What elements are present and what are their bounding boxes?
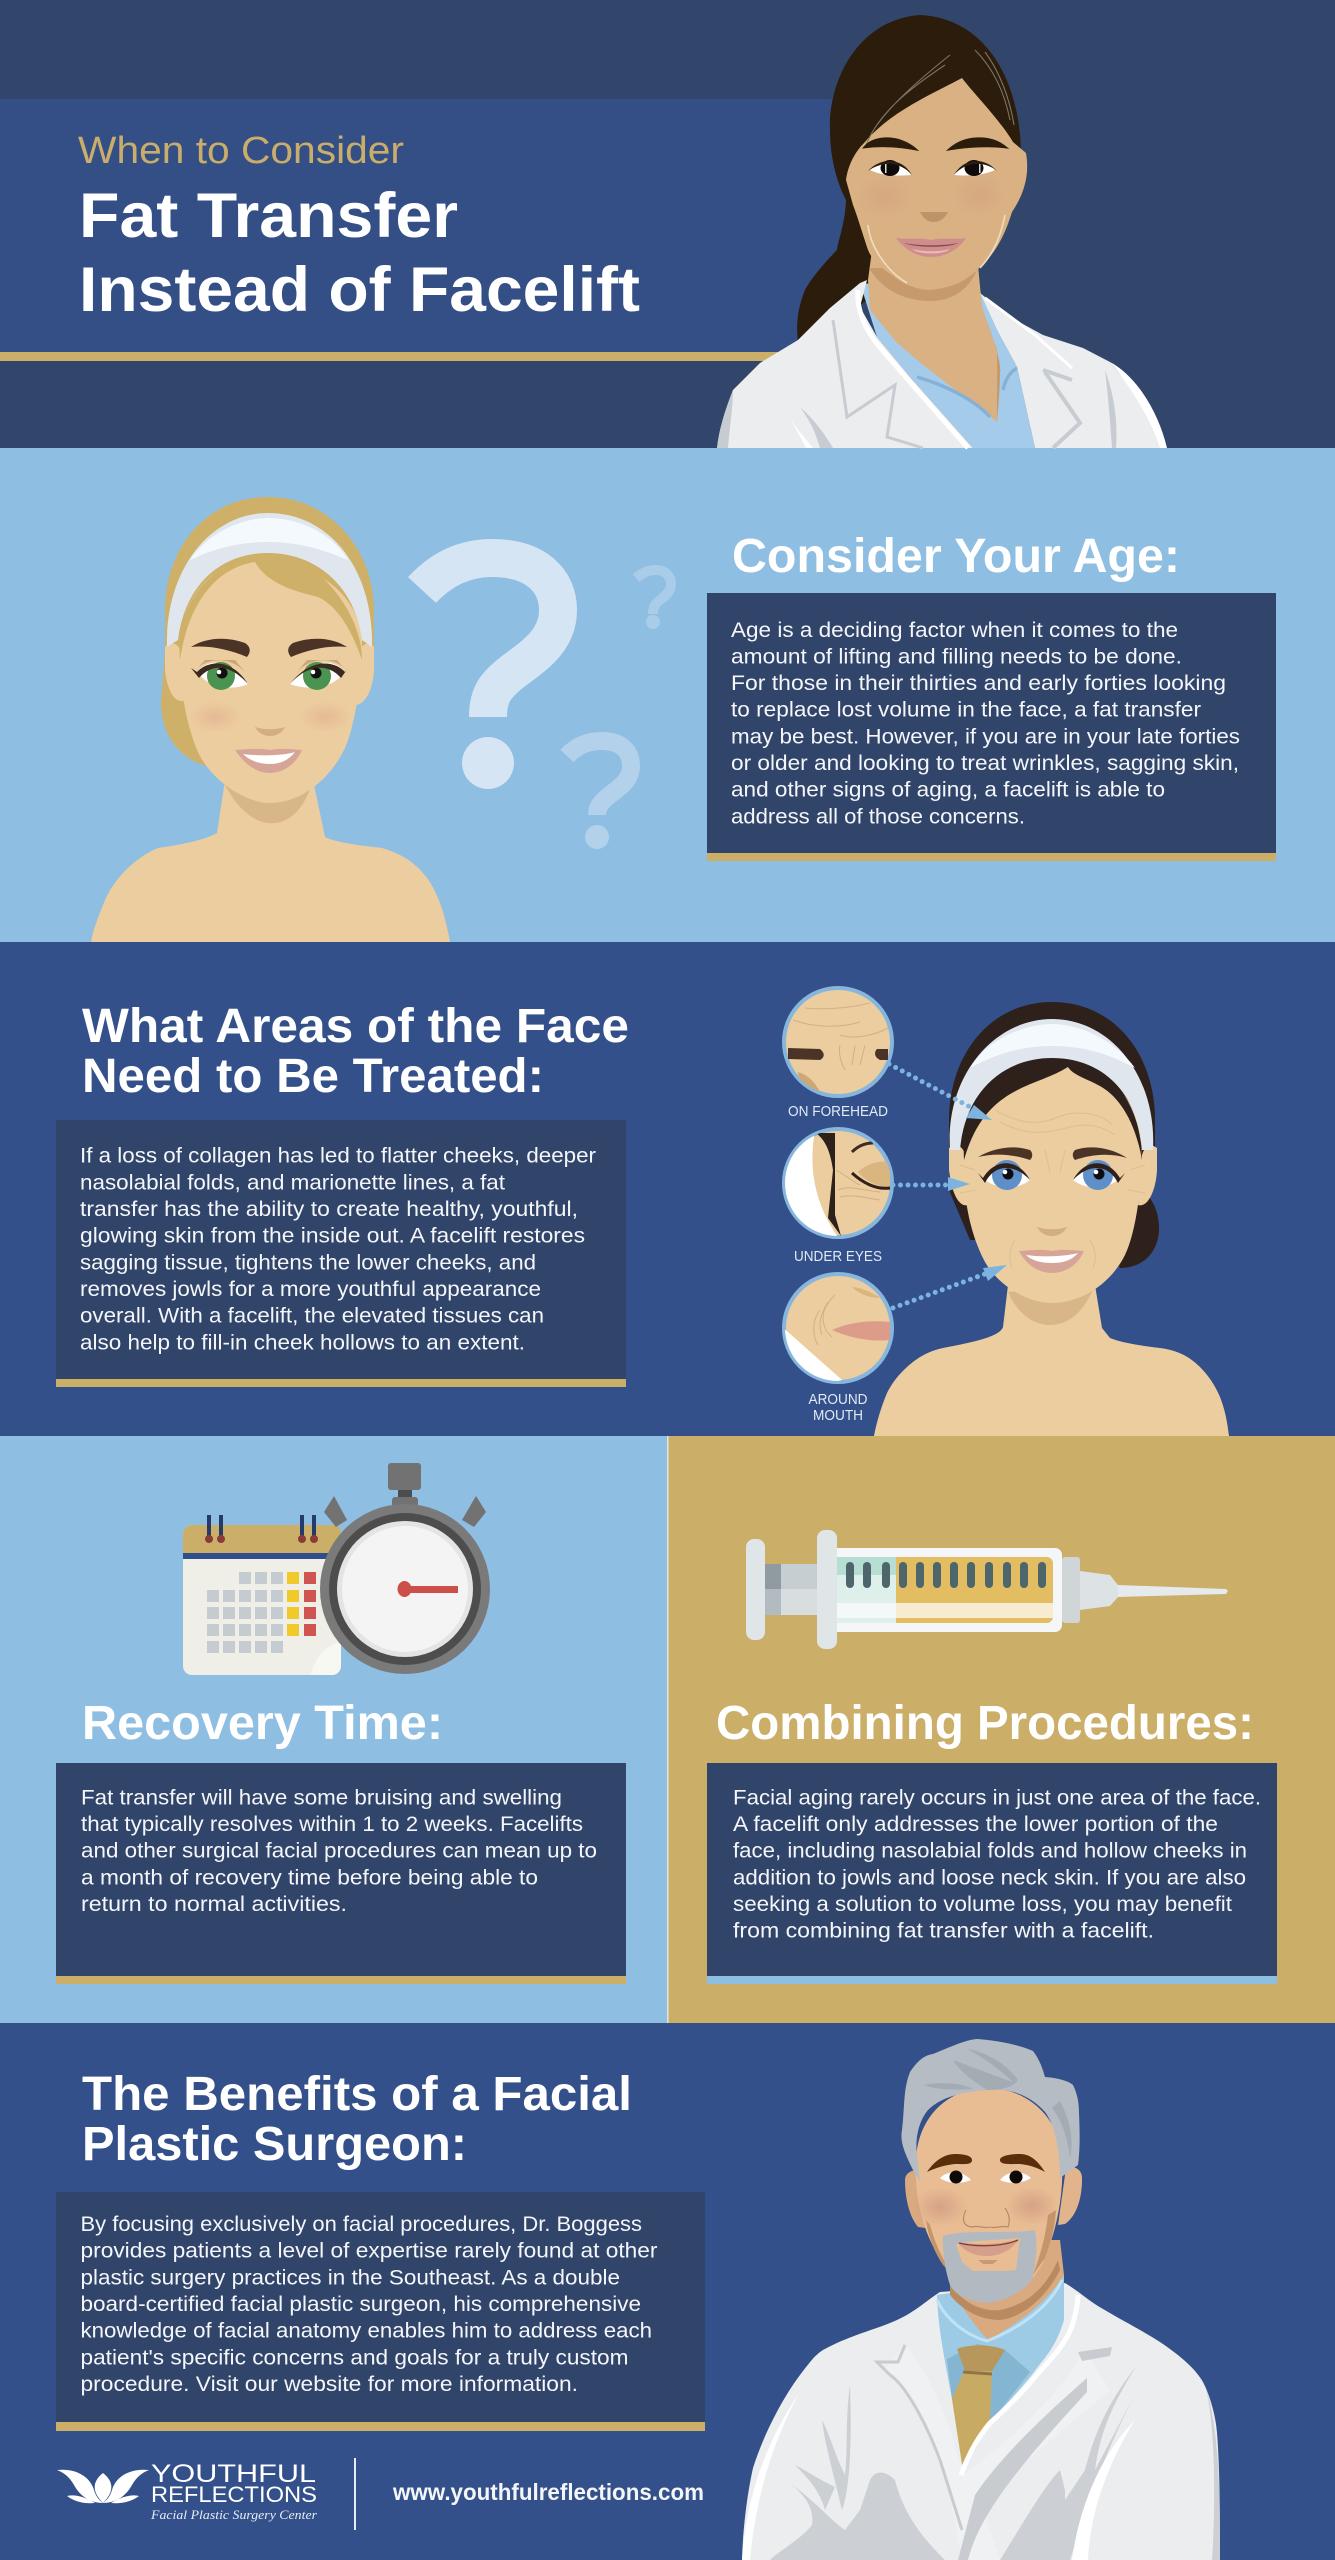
- arrow: under eyes: [893, 1177, 970, 1191]
- panel: consider your age: For those in their thirties and early forties looking: [731, 672, 1226, 695]
- logo mark: [57, 2470, 149, 2503]
- label: MOUTH: [813, 1407, 863, 1424]
- section background: face areas: [0, 942, 1335, 1436]
- panel: what areas of the face: also help to fill-in cheek hollows to an extent.: [80, 1331, 525, 1354]
- illustration: female doctor: [717, 15, 1167, 448]
- panel: recovery time: [56, 1763, 626, 1984]
- callout: on forehead: [784, 988, 892, 1120]
- heading: benefits of a facial plastic surgeon: The Benefits of a Facial: [82, 2068, 632, 2121]
- heading: what areas of the face: Need to Be Treated:: [82, 1050, 544, 1103]
- panel: recovery time: that typically resolves within 1 to 2 weeks. Facelifts: [81, 1813, 583, 1836]
- panel: consider your age: address all of those concerns.: [731, 805, 1025, 828]
- panel: combining procedures: Facial aging rarely occurs in just one area of the face.: [733, 1786, 1261, 1809]
- medium question mark: [567, 741, 631, 849]
- heading: consider your age: Consider Your Age:: [732, 530, 1180, 583]
- callout: around mouth: [780, 1274, 892, 1424]
- website url: www.youthfulreflections.com: [392, 2479, 704, 2505]
- panel: combining procedures: seeking a solution to volume loss, you may benefit: [733, 1893, 1232, 1916]
- panel: combining procedures: from combining fat transfer with a facelift.: [733, 1920, 1154, 1943]
- label: ON FOREHEAD: [788, 1103, 888, 1120]
- section background: recovery: [0, 1436, 668, 2023]
- coat lapels and folds: [885, 2345, 1110, 2560]
- label: AROUND: [808, 1391, 868, 1408]
- panel: combining procedures: A facelift only addresses the lower portion of the: [733, 1813, 1218, 1836]
- panel: benefits: board-certified facial plastic surgeon, his comprehensive: [80, 2293, 641, 2316]
- illustration: woman with wrinkles: [874, 1002, 1229, 1436]
- panel: consider your age: or older and looking to treat wrinkles, sagging skin,: [731, 752, 1239, 775]
- panel: what areas of the face: transfer has the ability to create healthy, youthful,: [80, 1198, 578, 1221]
- arrow: around mouth: [893, 1265, 1007, 1308]
- main title: [79, 181, 640, 325]
- title banner: [0, 99, 860, 361]
- logo wordmark: YOUTHFUL: [151, 2460, 316, 2488]
- footer divider: [354, 2458, 356, 2530]
- main title: Instead of Facelift: [79, 255, 640, 325]
- panel: combining procedures: addition to jowls and loose neck skin. If you are also: [733, 1866, 1246, 1889]
- panel: what areas of the face: If a loss of collagen has led to flatter cheeks, deeper: [80, 1145, 596, 1168]
- panel: consider your age: [707, 593, 1276, 861]
- panel: what areas of the face: sagging tissue, tightens the lower cheeks, and: [80, 1251, 536, 1274]
- section background: combining: [668, 1436, 1335, 2023]
- heading: what areas of the face: [82, 1000, 629, 1103]
- logo: youthful reflections: [57, 2460, 318, 2522]
- panel: benefits: By focusing exclusively on facial procedures, Dr. Boggess: [80, 2213, 642, 2236]
- heading: benefits of a facial plastic surgeon: Plastic Surgeon:: [82, 2118, 467, 2171]
- panel: benefits: patient's specific concerns and goals for a truly custom: [80, 2346, 628, 2369]
- panel: benefits: knowledge of facial anatomy enables him to address each: [80, 2320, 652, 2343]
- panel: consider your age: Age is a deciding factor when it comes to the: [731, 619, 1178, 642]
- panel: consider your age: may be best. However, if you are in your late forties: [731, 725, 1240, 748]
- panel: what areas of the face: [56, 1120, 626, 1387]
- panel: combining procedures: [707, 1763, 1277, 1984]
- icon: calendar: [183, 1515, 341, 1675]
- arrow: forehead: [889, 1064, 992, 1120]
- panel: consider your age: to replace lost volume in the face, a fat transfer: [731, 699, 1201, 722]
- panel: combining procedures: face, including nasolabial folds and hollow cheeks in: [733, 1840, 1247, 1863]
- illustration: male surgeon: [742, 2039, 1220, 2560]
- main title: Fat Transfer: [79, 181, 458, 251]
- panel: consider your age: amount of lifting and filling needs to be done.: [731, 646, 1182, 668]
- heading: recovery time: Recovery Time:: [82, 1697, 443, 1750]
- label: [808, 1391, 868, 1424]
- large question mark: [422, 558, 558, 789]
- panel: what areas of the face: removes jowls for a more youthful appearance: [80, 1278, 541, 1301]
- icon: syringe: [746, 1530, 1228, 1649]
- panel: benefits: plastic surgery practices in the Southeast. As a double: [80, 2266, 620, 2289]
- logo: youthful reflections: REFLECTIONS: [151, 2482, 317, 2507]
- callout: under eyes: [780, 1129, 892, 1265]
- small question mark: [636, 570, 671, 629]
- panel: benefits: [56, 2192, 705, 2431]
- header background: [0, 0, 1335, 448]
- panel: benefits: provides patients a level of expertise rarely found at other: [80, 2240, 658, 2263]
- panel: recovery time: a month of recovery time before being able to: [81, 1866, 538, 1889]
- section background: benefits: [0, 2023, 1335, 2560]
- panel: what areas of the face: overall. With a facelift, the elevated tissues can: [80, 1305, 544, 1328]
- panel: what areas of the face: glowing skin from the inside out. A facelift restores: [80, 1225, 585, 1248]
- heading: benefits of a facial plastic surgeon: [82, 2068, 632, 2171]
- icon: stopwatch: [320, 1463, 490, 1674]
- title kicker: When to Consider: [78, 130, 404, 172]
- heading: what areas of the face: What Areas of the Face: [82, 1000, 629, 1053]
- heading: combining procedures: Combining Procedures:: [716, 1697, 1254, 1750]
- panel: recovery time: Fat transfer will have some bruising and swelling: [81, 1786, 562, 1809]
- panel: benefits: procedure. Visit our website for more information.: [80, 2373, 578, 2396]
- icon: question marks: [422, 558, 671, 849]
- label: UNDER EYES: [794, 1248, 882, 1265]
- logo tagline: Facial Plastic Surgery Center: [150, 2507, 318, 2522]
- panel: recovery time: and other surgical facial procedures can mean up to: [81, 1840, 597, 1863]
- panel: recovery time: return to normal activities.: [81, 1893, 347, 1916]
- panel: what areas of the face: nasolabial folds, and marionette lines, a fat: [80, 1171, 505, 1194]
- section background: age: [0, 448, 1335, 942]
- illustration: woman with headband: [91, 497, 450, 942]
- panel: consider your age: and other signs of aging, a facelift is able to: [731, 779, 1165, 802]
